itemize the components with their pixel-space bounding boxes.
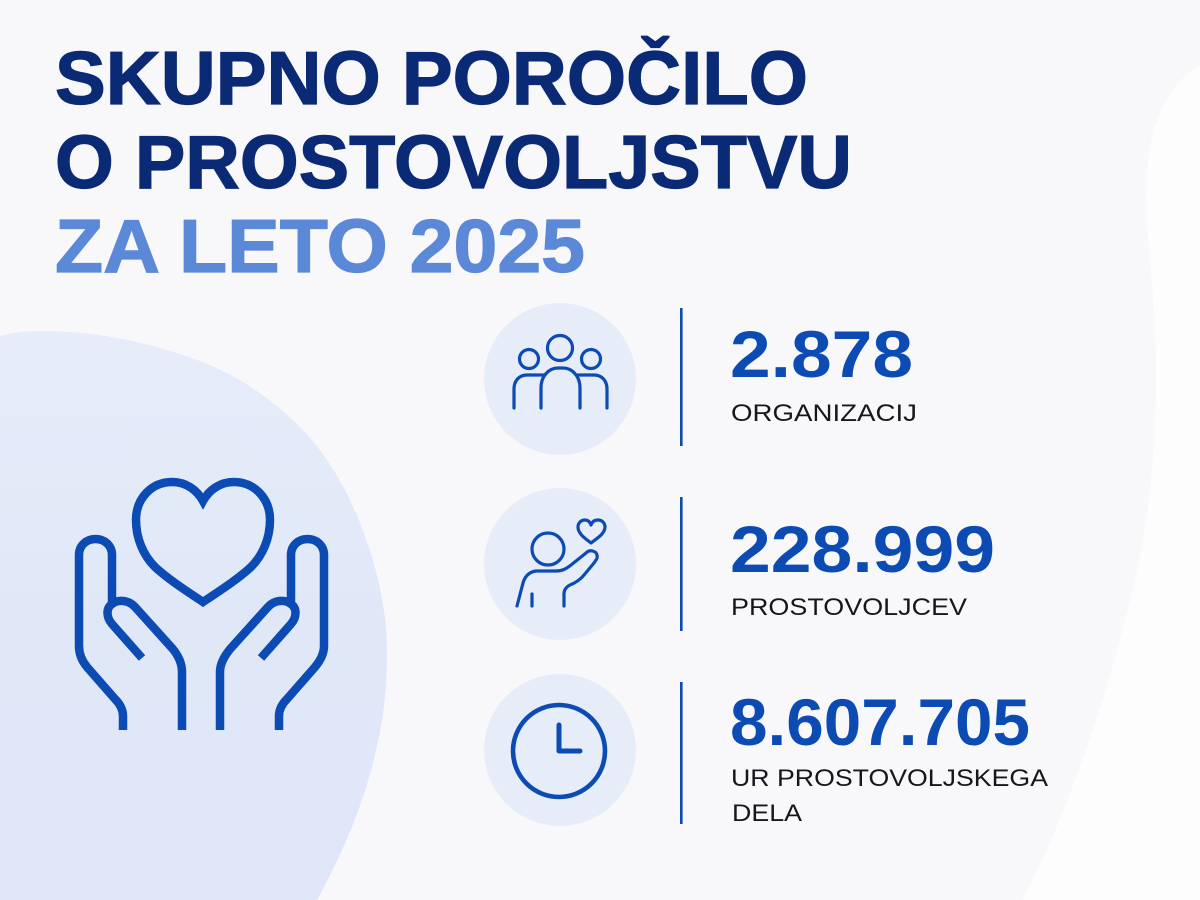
label xyxy=(731,765,1048,827)
icon: clock xyxy=(513,705,605,797)
icon part: right hand xyxy=(220,539,324,730)
title: ZA LETO 2025 xyxy=(55,204,585,288)
stat row: volunteers xyxy=(484,488,995,640)
divider xyxy=(680,308,683,446)
title: O PROSTOVOLJSTVU xyxy=(55,120,852,204)
background shape: left blue blob xyxy=(0,331,387,900)
stat row: organizations xyxy=(484,303,917,455)
label: UR PROSTOVOLJSKEGA xyxy=(731,765,1048,792)
divider xyxy=(680,682,683,824)
number: 2.878 xyxy=(730,317,913,391)
title: SKUPNO POROČILO xyxy=(55,36,808,120)
icon circle xyxy=(484,674,636,826)
icon: hands holding heart xyxy=(79,482,324,730)
background shape: right pale wave xyxy=(1022,66,1200,900)
icon: group of people xyxy=(514,336,607,408)
divider xyxy=(680,497,683,631)
title xyxy=(55,36,852,288)
number: 228.999 xyxy=(730,512,995,586)
stat row: volunteer hours xyxy=(484,674,1048,827)
icon circle xyxy=(484,303,636,455)
label: DELA xyxy=(732,800,802,827)
icon: volunteer with heart xyxy=(517,520,605,606)
label: ORGANIZACIJ xyxy=(731,400,917,427)
label: PROSTOVOLJCEV xyxy=(731,594,967,621)
number: 8.607.705 xyxy=(730,685,1030,759)
icon part: left hand xyxy=(79,539,182,730)
icon circle xyxy=(484,488,636,640)
icon part: heart xyxy=(136,482,270,602)
